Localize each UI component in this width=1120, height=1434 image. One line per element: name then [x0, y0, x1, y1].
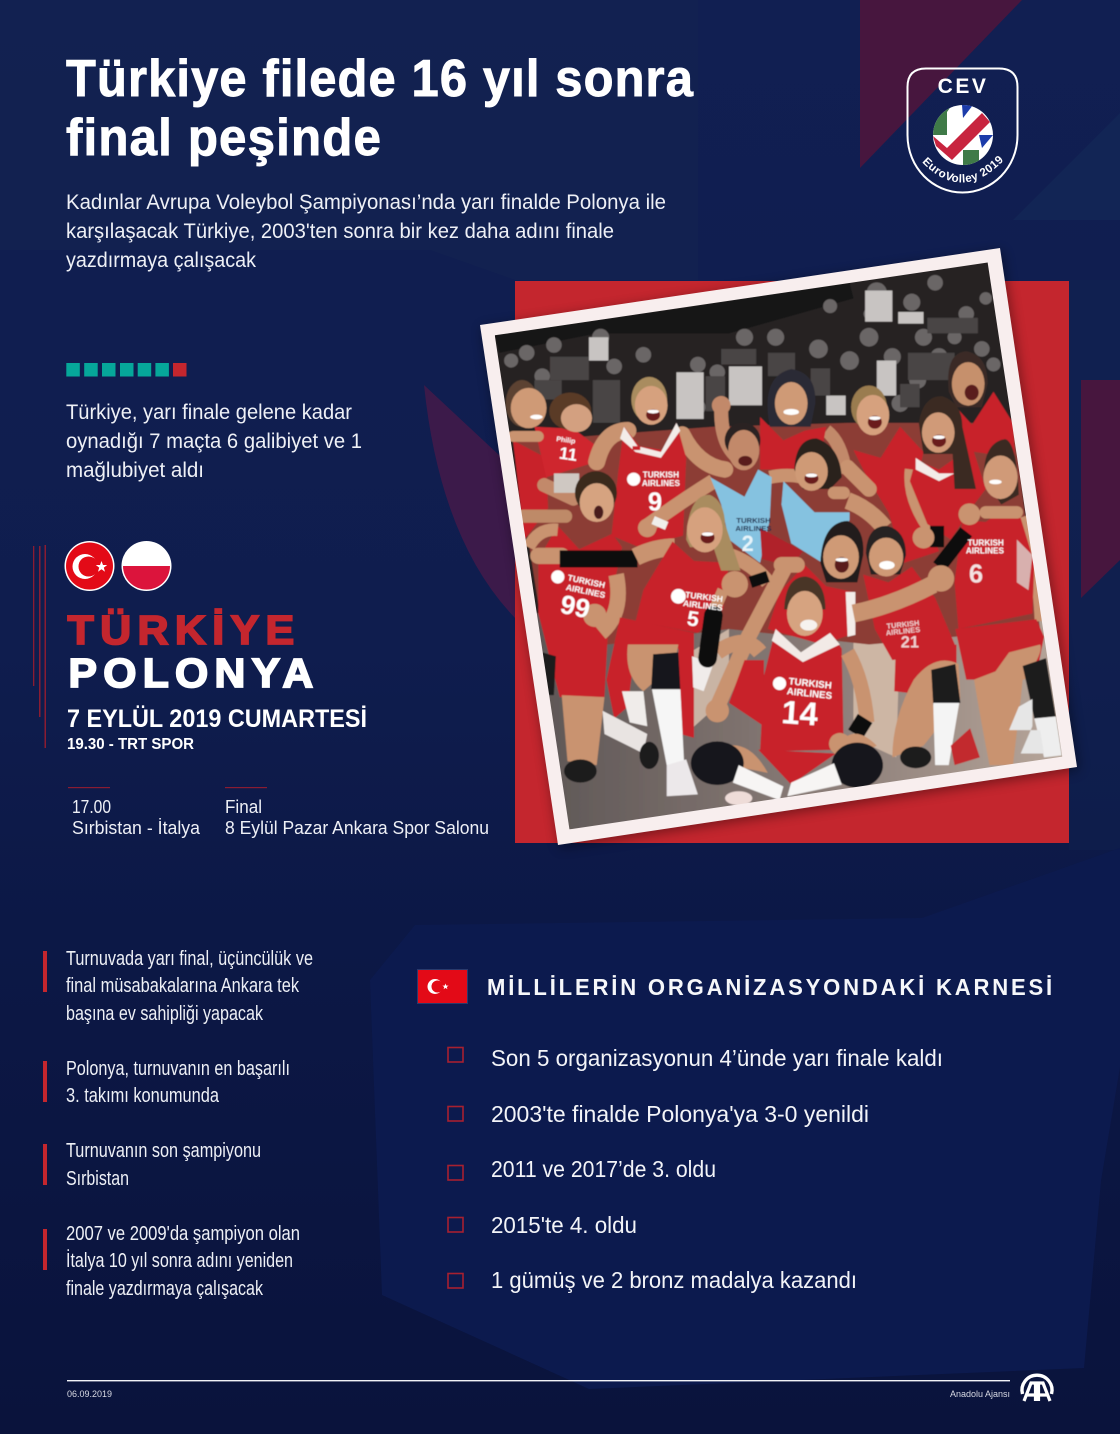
icon: Turkey flag circle: [64, 541, 114, 591]
logo: CEV EuroVolley 2019: [906, 68, 1018, 194]
intro text: karşılaşacak Türkiye, 2003'ten sonra bir kez daha adını finale: [66, 220, 614, 243]
jersey lettering: 5: [686, 607, 701, 632]
decorative match lines: [33, 545, 46, 748]
back row players: [506, 351, 1015, 563]
match title: [68, 607, 320, 696]
win-loss squares: [66, 363, 186, 376]
baby: [534, 427, 597, 477]
fact 3: Sırbistan: [66, 1168, 129, 1190]
logo: CEV EuroVolley 2019: CEV: [938, 75, 988, 98]
other semi-final: Sırbistan - İtalya: [72, 817, 201, 838]
jersey lettering: AIRLINES: [565, 582, 606, 600]
jersey lettering: AIRLINES: [682, 598, 724, 613]
fact 2: [43, 1058, 290, 1107]
fact 4: [43, 1223, 300, 1300]
jersey lettering: 6: [969, 560, 983, 588]
results text: mağlubiyet aldı: [66, 459, 204, 482]
player with ponytail: [911, 470, 935, 536]
fact 1: [43, 948, 313, 1025]
player number 21: [863, 567, 957, 660]
far left player: [513, 440, 548, 540]
bullet list: tournament facts: [43, 948, 313, 1300]
other semi-final: [68, 787, 201, 838]
record list: [448, 1045, 943, 1293]
top right player: [955, 392, 1015, 458]
player right of centre: [853, 427, 939, 563]
jersey lettering: AIRLINES: [966, 547, 1005, 556]
jersey lettering: TURKISH: [685, 590, 724, 604]
record item 5: 1 gümüş ve 2 bronz madalya kazandı: [491, 1267, 857, 1293]
fact 2: Polonya, turnuvanın en başarılı: [66, 1058, 290, 1080]
fact 3: [43, 1140, 261, 1190]
match title: TÜRKİYE: [68, 607, 300, 653]
final info: Final: [225, 796, 262, 817]
match date: 19.30 - TRT SPOR: [67, 736, 194, 753]
body mass behind players: [513, 423, 1040, 645]
jersey lettering: TURKISH: [567, 572, 606, 590]
match date: [67, 704, 367, 753]
title: Türkiye filede 16 yıl sonra: [66, 50, 694, 108]
jersey lettering: AIRLINES: [642, 479, 680, 488]
record item 4: 2015'te 4. oldu: [491, 1212, 637, 1238]
blue jersey 2: [647, 481, 713, 526]
jersey lettering: 21: [901, 634, 919, 652]
jersey lettering: 9: [648, 488, 662, 516]
icon: Poland flag circle: [120, 541, 173, 592]
back row players: Philip: [556, 436, 576, 446]
icon: AA logo: [1022, 1375, 1052, 1401]
player number 99: [538, 526, 622, 629]
number 9 player: [597, 431, 628, 462]
jersey lettering: 2: [742, 531, 754, 556]
jersey lettering: 14: [780, 693, 819, 733]
fact 4: 2007 ve 2009'da şampiyon olan: [66, 1223, 300, 1245]
jersey lettering: AIRLINES: [885, 625, 921, 637]
intro text: Kadınlar Avrupa Voleybol Şampiyonası’nda yarı finalde Polonya ile: [66, 191, 666, 214]
footer rule: [67, 1380, 1010, 1381]
back row players: 11: [558, 444, 579, 465]
middle row players: [529, 422, 1062, 796]
jersey lettering: TURKISH: [968, 538, 1004, 547]
footer date: 06.09.2019: [67, 1389, 112, 1399]
fact 2: 3. takımı konumunda: [66, 1085, 220, 1107]
jersey lettering: TURKISH: [643, 470, 679, 479]
fact 1: başına ev sahipliği yapacak: [66, 1003, 264, 1025]
fact 1: final müsabakalarına Ankara tek: [66, 975, 300, 997]
title: final peşinde: [66, 109, 382, 167]
fact 3: Turnuvanın son şampiyonu: [66, 1140, 261, 1162]
jersey lettering: AIRLINES: [786, 686, 833, 702]
jersey lettering: TURKISH: [886, 618, 920, 631]
fact 4: İtalya 10 yıl sonra adını yeniden: [66, 1249, 293, 1272]
match title: POLONYA: [68, 650, 320, 696]
crowd backdrop: [494, 262, 1026, 830]
footer credit: Anadolu Ajansı: [950, 1389, 1010, 1399]
photo frame: [480, 248, 1077, 845]
photo: team celebrating: [494, 262, 1062, 830]
jersey lettering: TURKISH: [788, 676, 832, 692]
player with raised arm: [768, 565, 855, 645]
title: [66, 50, 694, 167]
logo: CEV EuroVolley 2019: EuroVolley 2019: [922, 156, 1002, 183]
final info: 8 Eylül Pazar Ankara Spor Salonu: [225, 817, 489, 838]
other semi-final: 17.00: [72, 796, 111, 817]
jersey lettering: 99: [558, 589, 593, 624]
fact 1: Turnuvada yarı final, üçüncülük ve: [66, 948, 313, 970]
top centre player: [713, 411, 730, 460]
jersey lettering: AIRLINES: [735, 524, 772, 533]
jersey lettering: [551, 470, 1005, 733]
fact 4: finale yazdırmaya çalışacak: [66, 1278, 264, 1300]
heading: team record: MİLLİLERİN ORGANİZASYONDAKİ KARNESİ: [487, 974, 1055, 1000]
match date: 7 EYLÜL 2019 CUMARTESİ: [67, 704, 367, 733]
player number 6: [1025, 516, 1040, 621]
record item 1: Son 5 organizasyonun 4’ünde yarı finale kaldı: [491, 1045, 943, 1071]
record item 2: 2003'te finalde Polonya'ya 3-0 yenildi: [491, 1101, 869, 1127]
intro text: [66, 191, 666, 272]
record item 3: 2011 ve 2017’de 3. oldu: [491, 1156, 716, 1182]
icon: Turkey flag rectangle: [417, 969, 468, 1004]
photo frame shadow: [482, 251, 1079, 848]
final info: [225, 787, 489, 838]
floor: [536, 612, 1062, 830]
red photo backing: [515, 281, 1069, 843]
jersey lettering: TURKISH: [736, 516, 771, 525]
front centre player 14: [691, 571, 883, 805]
results text: Türkiye, yarı finale gelene kadar: [66, 401, 352, 424]
blue jersey keeper: [848, 501, 885, 528]
intro text: yazdırmaya çalışacak: [66, 249, 256, 272]
results text: oynadığı 7 maçta 6 galibiyet ve 1: [66, 430, 362, 453]
results text: [66, 401, 362, 482]
player number 5: [729, 555, 768, 582]
